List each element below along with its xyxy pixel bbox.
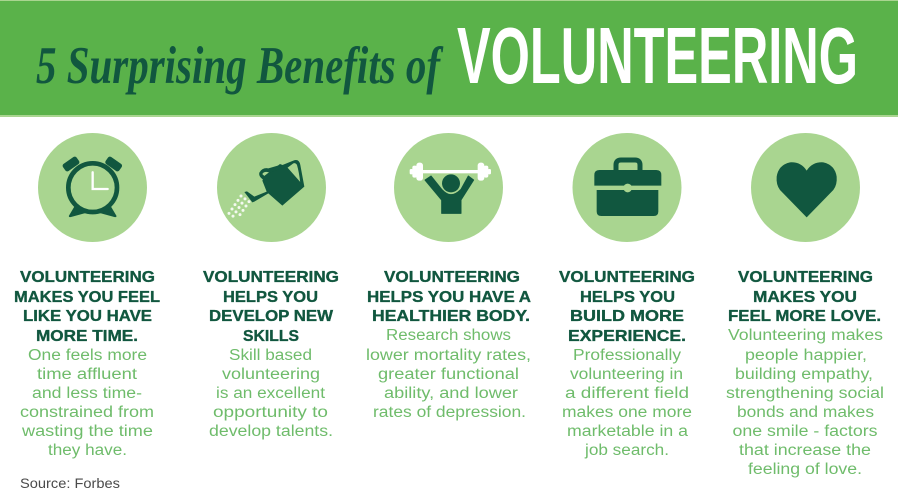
heading: new skills: HELPS YOU: [223, 289, 318, 306]
body: new skills: [209, 347, 333, 440]
body: more love: building empathy,: [735, 366, 873, 383]
header banner: [0, 0, 898, 117]
body: more love: bonds and makes: [737, 404, 874, 421]
heading: new skills: SKILLS: [243, 328, 299, 345]
body: more experience: a different field: [565, 385, 689, 402]
body: healthier body: ability, and lower: [384, 385, 518, 402]
heading: healthier body: HELPS YOU HAVE A: [367, 289, 531, 306]
heading: more time: LIKE YOU HAVE: [23, 308, 152, 325]
heading: more experience: BUILD MORE: [570, 308, 684, 325]
body: new skills: is an excellent: [216, 385, 326, 402]
body: healthier body: rates of depression.: [373, 404, 526, 421]
column 3 text: [366, 269, 531, 421]
body: healthier body: [366, 327, 531, 421]
icon: briefcase: [572, 133, 682, 242]
body: more love: that increase the: [739, 442, 871, 459]
heading: more experience: HELPS YOU: [580, 289, 675, 306]
title: 5 Surprising Benefits of: 5 Surprising Benefits of: [36, 37, 444, 95]
body: new skills: opportunity to: [213, 404, 328, 421]
body: more experience: makes one more: [562, 404, 692, 421]
heading: new skills: DEVELOP NEW: [209, 308, 334, 325]
body: more time: and less time-: [32, 385, 142, 402]
column 5 text: [726, 269, 884, 478]
body: more experience: marketable in a: [567, 423, 688, 440]
body: new skills: develop talents.: [209, 423, 333, 440]
heading: more time: [14, 269, 160, 345]
heading: healthier body: VOLUNTEERING: [384, 269, 520, 286]
body: more experience: job search.: [584, 442, 669, 459]
column 2 text: [203, 269, 339, 440]
body: more time: One feels more: [28, 347, 147, 364]
body: new skills: Skill based: [229, 347, 312, 364]
body: healthier body: Research shows: [386, 327, 511, 344]
body: more love: Volunteering makes: [728, 327, 883, 344]
heading: more experience: [559, 269, 695, 345]
heading: new skills: VOLUNTEERING: [203, 269, 339, 286]
heading: more time: MORE TIME.: [36, 328, 138, 345]
icon: weightlifter: [394, 133, 503, 242]
body: more time: wasting the time: [21, 423, 153, 440]
source note: Source: Forbes: [20, 476, 120, 491]
heading: healthier body: [367, 269, 531, 325]
heading: more time: VOLUNTEERING: [20, 269, 155, 286]
heading: more love: VOLUNTEERING: [738, 269, 873, 286]
heading: healthier body: HEALTHIER BODY.: [372, 308, 530, 325]
column 1 text: [14, 269, 160, 459]
body: more time: time affluent: [37, 366, 138, 383]
icon: watering can: [217, 133, 326, 242]
heading: more love: MAKES YOU: [753, 289, 857, 306]
body: more experience: Professionally: [573, 347, 681, 364]
body: new skills: volunteering: [222, 366, 320, 383]
heading: new skills: [203, 269, 339, 345]
body: more time: constrained from: [20, 404, 154, 421]
body: more experience: volunteering in: [570, 366, 683, 383]
body: healthier body: lower mortality rates,: [366, 347, 531, 364]
body: more love: feeling of love.: [748, 461, 862, 478]
body: more experience: [562, 347, 692, 459]
icon: heart: [751, 133, 860, 242]
heading: more experience: VOLUNTEERING: [559, 269, 695, 286]
body: more time: they have.: [48, 442, 127, 459]
body: more love: one smile - factors: [732, 423, 878, 440]
body: more love: [726, 327, 884, 478]
column 4 text: [559, 269, 695, 459]
heading: more love: FEEL MORE LOVE.: [728, 308, 881, 325]
icon: alarm clock: [38, 133, 147, 242]
heading: more time: MAKES YOU FEEL: [14, 289, 160, 306]
heading: more love: [728, 269, 881, 325]
body: more time: [20, 347, 154, 459]
body: more love: people happier,: [745, 347, 867, 364]
body: more love: strengthening social: [726, 385, 884, 402]
body: healthier body: greater functional: [378, 366, 519, 383]
heading: more experience: EXPERIENCE.: [568, 328, 686, 345]
